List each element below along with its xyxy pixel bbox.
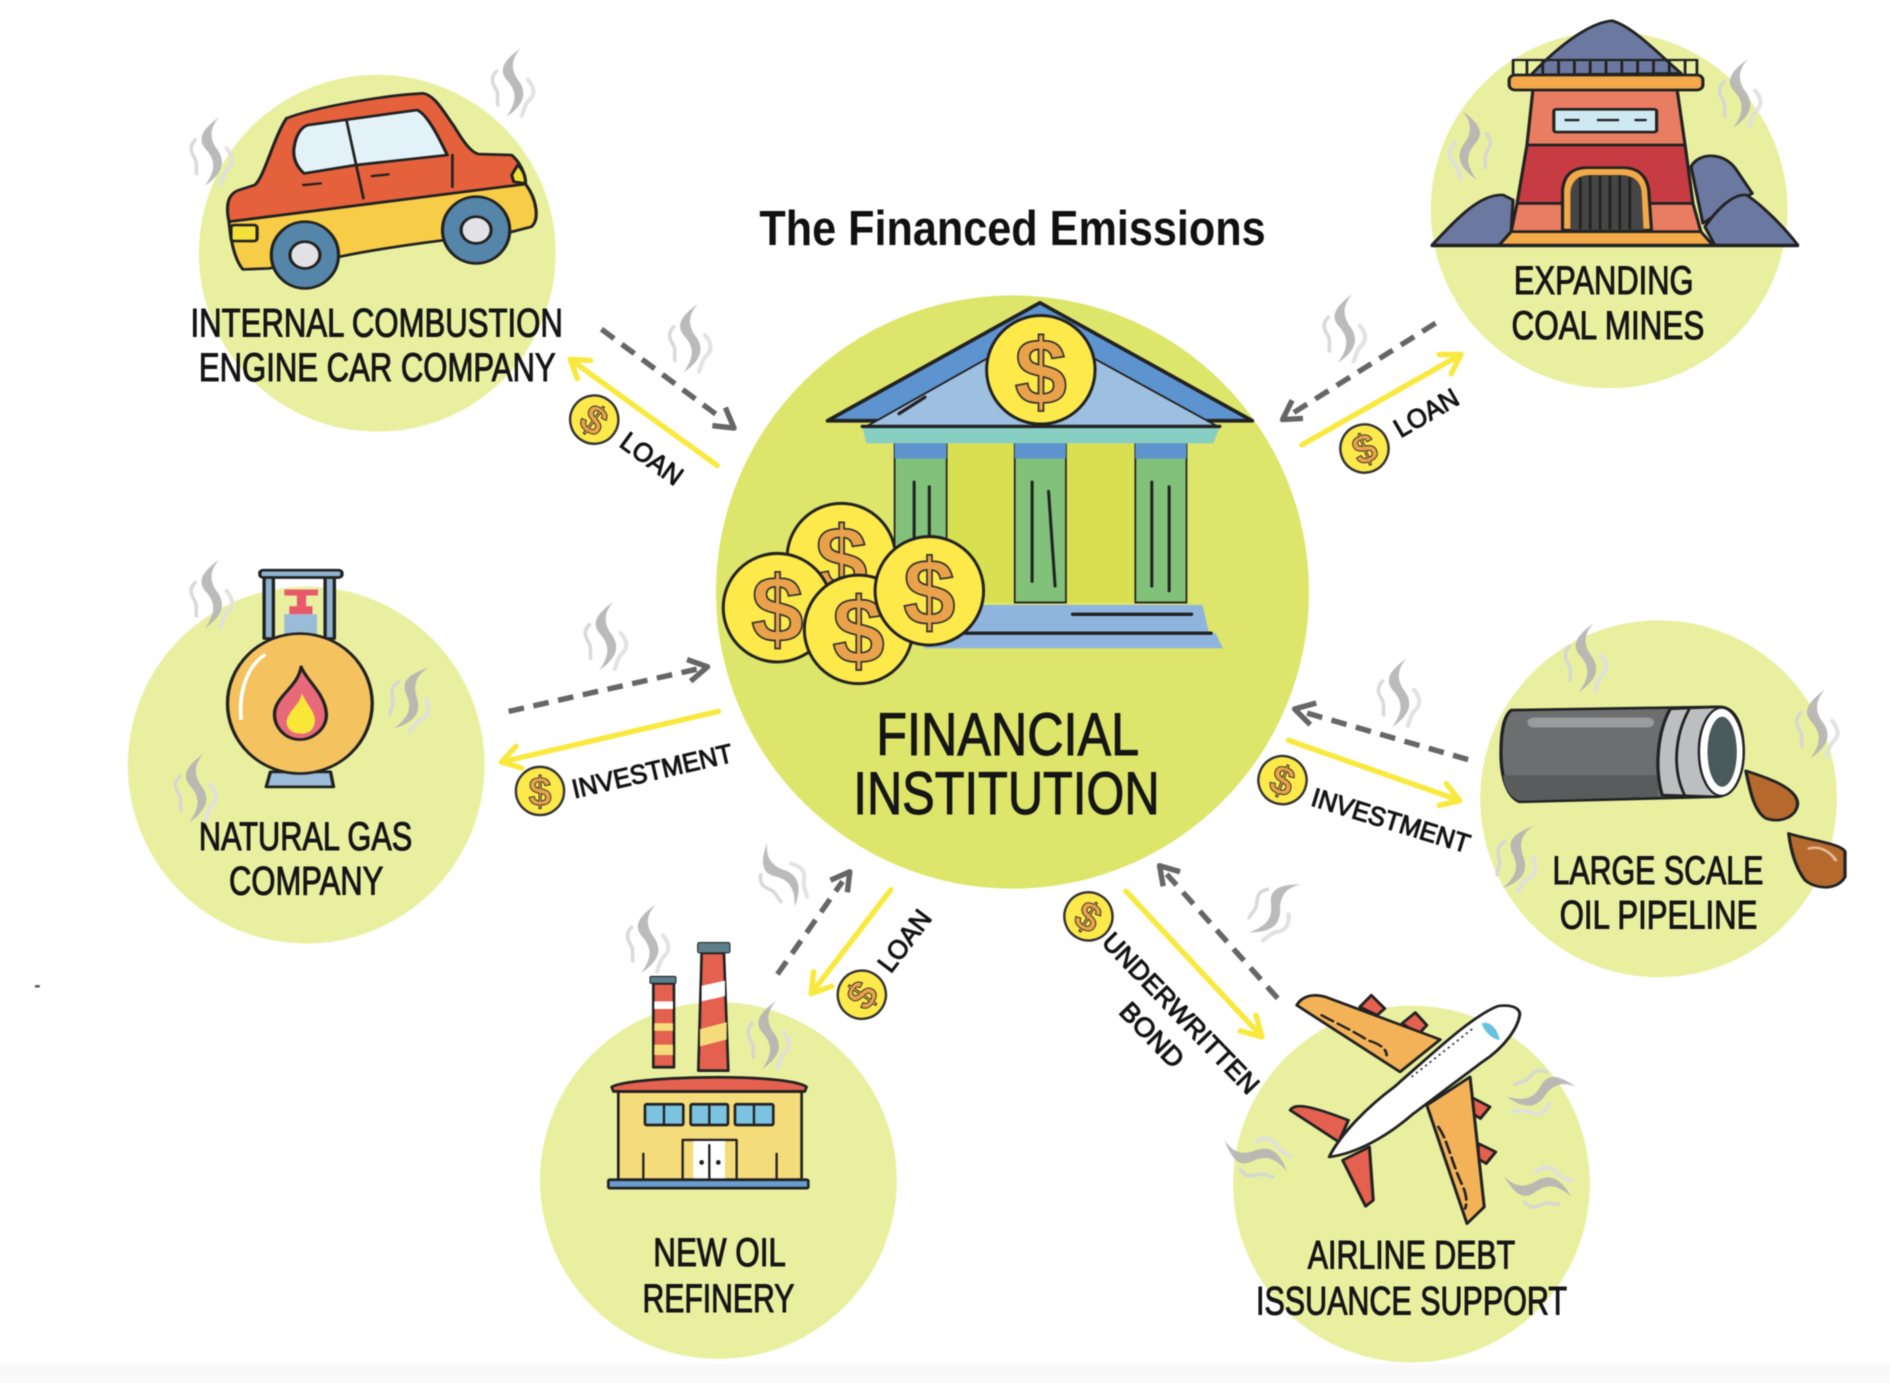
label: natural gas company: NATURAL GAS bbox=[199, 815, 412, 859]
label: car company: ENGINE CAR COMPANY bbox=[199, 346, 556, 390]
icon: bank building bbox=[827, 303, 1252, 648]
icon: smoke bbox=[1449, 111, 1490, 180]
icon: car bbox=[228, 93, 536, 288]
icon: coin pile: $ bbox=[832, 578, 885, 683]
label: natural gas company: COMPANY bbox=[229, 860, 383, 904]
label: car company bbox=[190, 301, 563, 390]
arrow: emissions return bbox=[601, 329, 734, 428]
icon: airplane bbox=[1290, 995, 1520, 1224]
label: underwritten bond: UNDERWRITTEN bbox=[1096, 927, 1265, 1100]
flow: coal mines bbox=[1282, 294, 1464, 479]
icon: smoke bbox=[748, 1001, 789, 1070]
panel: oil refinery bbox=[540, 904, 897, 1359]
icon: smoke bbox=[1324, 294, 1365, 363]
icon: coin bbox=[1056, 883, 1121, 949]
icon: coin: $ bbox=[529, 768, 552, 814]
icon: gas cylinder bbox=[228, 570, 372, 787]
icon: smoke bbox=[492, 48, 533, 117]
icon: smoke bbox=[1238, 868, 1311, 948]
panel: coal mines bbox=[1431, 21, 1798, 388]
arrow: emissions return bbox=[1160, 866, 1278, 998]
panel: car company bbox=[190, 48, 563, 432]
icon: coin: $ bbox=[1067, 891, 1110, 943]
label: car company: INTERNAL COMBUSTION bbox=[190, 301, 563, 345]
icon: coin bbox=[561, 386, 628, 453]
icon: pediment coin: $ bbox=[1015, 319, 1067, 424]
arrow: emissions return bbox=[509, 660, 708, 711]
icon: smoke bbox=[175, 754, 216, 822]
icon: coin pile: $ bbox=[751, 556, 804, 661]
icon: factory bbox=[608, 942, 808, 1188]
icon: smoke bbox=[1502, 1060, 1580, 1122]
label: coal mines bbox=[1512, 259, 1704, 348]
icon: smoke bbox=[191, 117, 232, 186]
icon: coin pile: $ bbox=[903, 540, 955, 645]
icon: smoke bbox=[1378, 658, 1419, 727]
arrow: investment bbox=[501, 711, 718, 768]
label: airline debt bbox=[1256, 1233, 1567, 1323]
icon: smoke bbox=[1719, 59, 1760, 128]
label: oil refinery bbox=[642, 1231, 794, 1321]
icon: pipe with oil drops bbox=[1501, 707, 1845, 887]
label: loan: LOAN bbox=[1388, 382, 1464, 443]
label: financial institution: INSTITUTION bbox=[853, 759, 1160, 827]
label: loan: LOAN bbox=[872, 904, 938, 978]
label: loan: LOAN bbox=[615, 426, 689, 491]
icon: coin: $ bbox=[1264, 755, 1301, 806]
arrow: investment bbox=[1289, 740, 1460, 805]
label: investment: INVESTMENT bbox=[1308, 782, 1474, 859]
icon: coin bbox=[516, 767, 564, 815]
icon: smoke bbox=[670, 304, 711, 373]
panel: natural gas company bbox=[128, 559, 485, 944]
flow: oil refinery bbox=[744, 835, 938, 1028]
arrow: loan bbox=[811, 890, 891, 994]
icon: coin: $ bbox=[571, 395, 617, 445]
arrow: emissions return bbox=[777, 872, 850, 974]
arrow: loan bbox=[570, 359, 717, 465]
icon: coin: $ bbox=[1346, 423, 1383, 474]
flow: oil pipeline bbox=[1252, 658, 1474, 859]
arrow: underwritten bond bbox=[1126, 891, 1262, 1037]
label: financial institution: FINANCIAL bbox=[876, 700, 1139, 768]
label: natural gas company bbox=[199, 815, 412, 904]
arrow: loan bbox=[1302, 354, 1461, 445]
icon: smoke bbox=[1217, 1128, 1294, 1185]
arrow: emissions return bbox=[1295, 703, 1468, 760]
icon: coin pile: $ bbox=[815, 507, 867, 612]
label: coal mines: COAL MINES bbox=[1512, 304, 1704, 348]
label: oil refinery: NEW OIL bbox=[653, 1231, 786, 1275]
panel: airline debt bbox=[1217, 995, 1590, 1363]
icon: smoke bbox=[381, 659, 441, 737]
arrow: emissions return bbox=[1282, 323, 1436, 420]
icon: smoke bbox=[191, 559, 232, 628]
label: oil refinery: REFINERY bbox=[642, 1277, 794, 1321]
icon: pediment coin bbox=[987, 316, 1095, 424]
panel: financial institution bbox=[716, 295, 1309, 889]
icon: smoke bbox=[1489, 818, 1546, 895]
label: airline debt: ISSUANCE SUPPORT bbox=[1256, 1279, 1567, 1323]
label: investment: INVESTMENT bbox=[569, 738, 735, 804]
icon: smoke bbox=[585, 602, 626, 670]
icon: coin pile bbox=[723, 503, 984, 684]
label: underwritten bond: BOND bbox=[1113, 996, 1190, 1074]
icon: coin bbox=[828, 961, 895, 1028]
title: The Financed Emissions bbox=[759, 201, 1266, 256]
flow: natural gas bbox=[501, 602, 735, 815]
label: airline debt: AIRLINE DEBT bbox=[1308, 1233, 1515, 1277]
icon: smoke bbox=[1797, 690, 1838, 758]
label: oil pipeline: LARGE SCALE bbox=[1552, 849, 1763, 893]
panel: oil pipeline bbox=[1480, 620, 1845, 977]
flow: car company bbox=[561, 304, 734, 491]
flow: airline bbox=[1056, 866, 1311, 1100]
icon: coal mine bbox=[1432, 21, 1798, 246]
icon: coin bbox=[1252, 749, 1313, 811]
icon: smoke bbox=[1501, 1163, 1574, 1210]
label: financial institution bbox=[853, 700, 1160, 827]
icon: smoke bbox=[1565, 623, 1606, 692]
icon: smoke bbox=[627, 904, 668, 973]
icon: coin bbox=[1334, 418, 1395, 479]
label: oil pipeline: OIL PIPELINE bbox=[1560, 893, 1757, 937]
label: coal mines: EXPANDING bbox=[1514, 259, 1694, 303]
label: oil pipeline bbox=[1552, 849, 1763, 937]
icon: smoke bbox=[744, 835, 817, 915]
icon: coin: $ bbox=[837, 972, 888, 1018]
